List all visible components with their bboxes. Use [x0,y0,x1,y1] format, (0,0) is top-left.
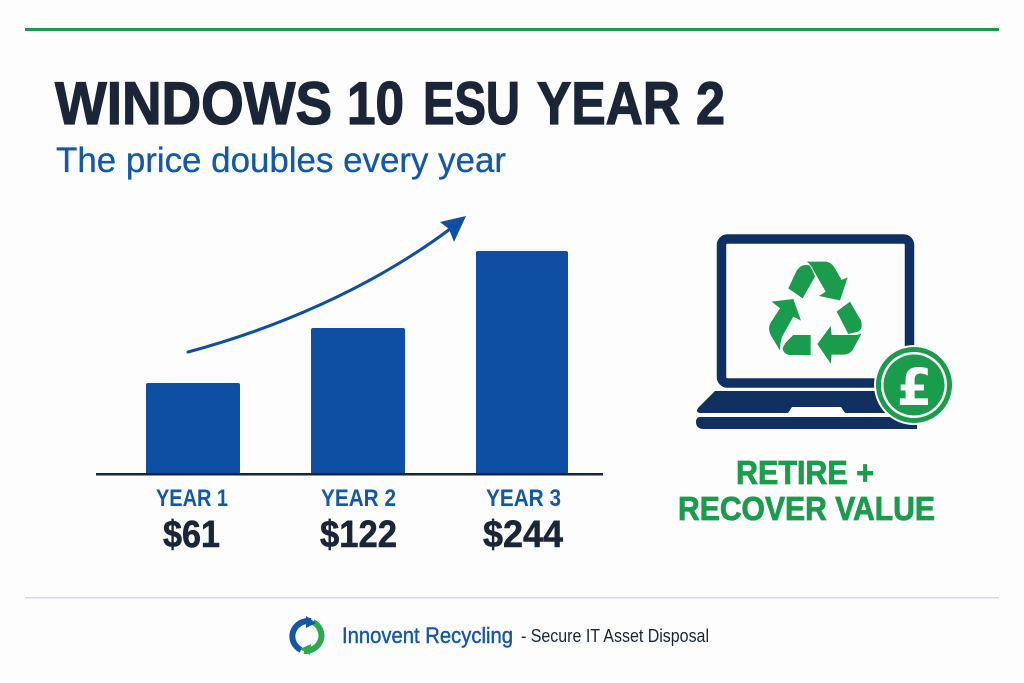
chart baseline [96,473,603,476]
label: year 3: YEAR 3 [486,485,561,512]
footer brand text [342,623,709,648]
label: year 3: $244 [483,514,563,556]
title: 10 [347,70,404,137]
callout: retire and recover value [678,454,935,527]
title: WINDOWS [55,70,332,137]
label: year 1 [156,485,228,556]
bar: year 3 [476,251,568,474]
callout: retire and recover value: RETIRE + [736,454,874,491]
footer brand text: Innovent Recycling [342,623,513,648]
label: year 1: YEAR 1 [156,485,228,512]
icon: laptop with recycling symbol and pound coin [696,239,954,429]
bar chart [96,216,603,556]
bar: year 1 [146,383,240,474]
footer brand text: - Secure IT Asset Disposal [521,625,709,646]
label: year 2: $122 [320,514,397,556]
title: 2 [696,70,725,137]
title: YEAR [537,70,680,137]
label: year 1: $61 [163,514,220,556]
icon: pound coin [874,345,954,425]
arrow: rising price trend [188,216,466,352]
label: year 2: YEAR 2 [321,485,396,512]
footer divider [25,597,999,598]
callout: retire and recover value: RECOVER VALUE [678,490,935,527]
top accent line [25,28,999,31]
laptop [696,239,917,429]
title [55,70,725,137]
footer logo [292,616,321,655]
title: ESU [423,70,520,137]
bar: year 2 [311,328,405,474]
icon: recycling arrows [769,262,862,364]
label: year 3 [483,485,563,556]
icon: pound coin: £ [897,359,932,418]
subtitle: The price doubles every year [56,141,506,180]
label: year 2 [320,485,397,556]
